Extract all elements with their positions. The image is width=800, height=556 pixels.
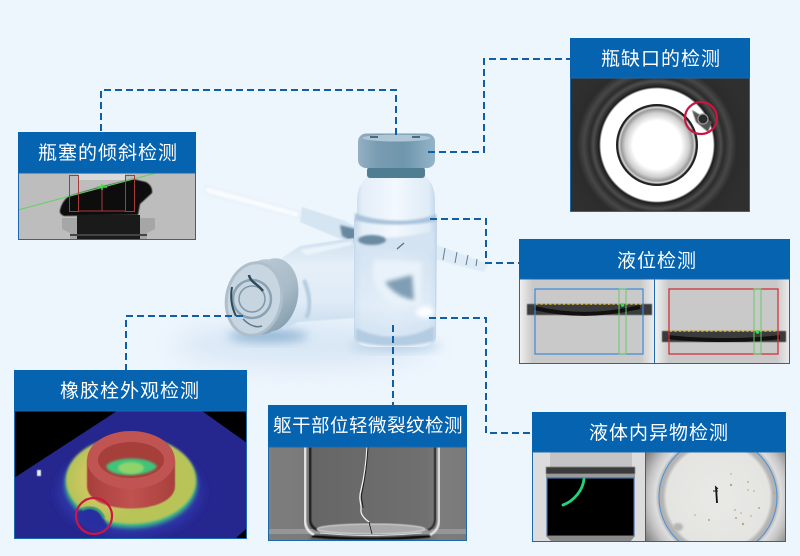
heading: 瓶缺口的检测 — [601, 48, 721, 70]
heading: 瓶塞的倾斜检测 — [38, 142, 178, 164]
panel: liquid level inspection — [519, 239, 790, 364]
connector: liquid level — [430, 219, 519, 263]
panel: body micro-crack inspection — [268, 405, 467, 541]
connector: rubber stopper — [126, 316, 243, 370]
photo: crack in glass — [269, 448, 466, 540]
heading — [532, 412, 786, 452]
vial cap — [358, 134, 435, 168]
heading — [570, 38, 750, 78]
panel: bottle chip inspection — [570, 38, 750, 212]
upright vial — [354, 134, 437, 347]
photo: level left — [520, 280, 654, 363]
lying vial cap — [219, 254, 304, 341]
panel: rubber stopper appearance inspection — [14, 370, 247, 539]
connector: bottle chip — [428, 59, 570, 152]
heading — [14, 370, 247, 411]
photo: side view — [533, 452, 645, 541]
photo: tilted stopper — [19, 174, 195, 239]
heading: 液位检测 — [617, 250, 697, 272]
lying vial — [219, 238, 354, 341]
heading: 液体内异物检测 — [589, 422, 729, 444]
central photo: vials and syringe — [175, 134, 488, 367]
photo: bottle mouth — [571, 78, 749, 211]
panel: foreign matter in liquid inspection — [532, 412, 786, 556]
red highlight circle — [76, 498, 112, 534]
heading — [18, 132, 196, 173]
photo: top view with particles — [646, 452, 785, 541]
connector: foreign matter — [429, 318, 532, 433]
heading — [268, 405, 467, 447]
connector: body cracks — [392, 325, 394, 405]
photo: 3D height map — [15, 412, 246, 538]
heading: 躯干部位轻微裂纹检测 — [273, 415, 463, 436]
heading — [519, 239, 790, 279]
red highlight circle — [685, 102, 717, 134]
panel: stopper tilt inspection — [18, 132, 196, 240]
heading: 橡胶栓外观检测 — [60, 380, 200, 402]
connector: stopper tilt — [101, 90, 396, 135]
photo: level right — [655, 280, 789, 363]
syringe — [205, 186, 488, 272]
